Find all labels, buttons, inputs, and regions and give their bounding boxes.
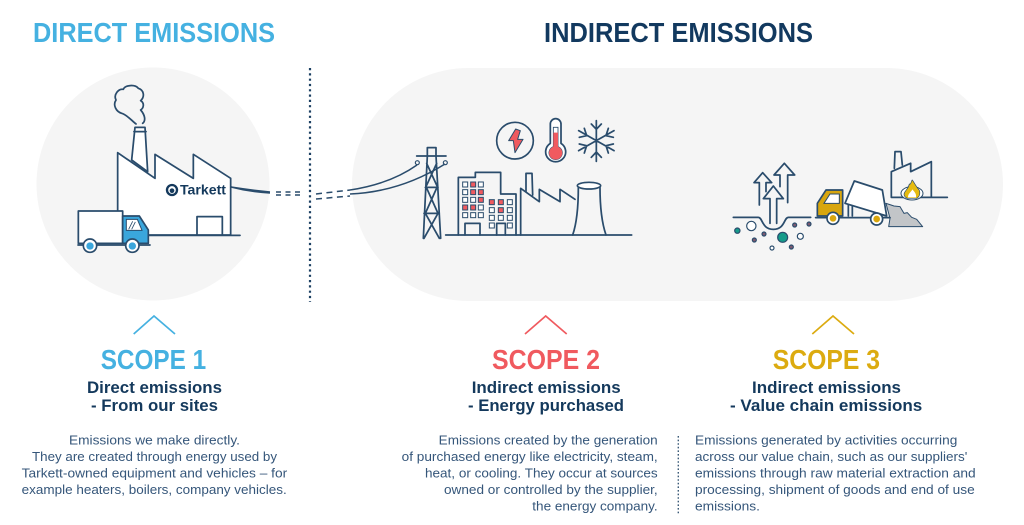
panel: indirect emissions pill <box>352 68 1003 301</box>
icon: flame <box>901 180 923 200</box>
scope 2 subheading <box>468 378 624 415</box>
scope 3 description <box>695 432 976 514</box>
icon: waste pile <box>886 203 923 227</box>
icon: dump truck <box>816 181 890 225</box>
icon: yellow chevron <box>812 316 854 334</box>
scope 1 subheading: Direct emissions <box>87 378 222 397</box>
icon: power plant factory <box>521 173 575 235</box>
scope 3 description: emissions through raw material extraction and <box>695 466 976 480</box>
illustration: Tarkett factory with truck <box>78 86 240 252</box>
column: scope 1 <box>22 316 288 497</box>
icon: factory building <box>118 153 231 235</box>
icon: transmission pylon <box>415 148 447 238</box>
scope 1 subheading <box>87 378 222 415</box>
scope 1 subheading: - From our sites <box>91 396 218 415</box>
icon: ground extraction <box>733 217 811 229</box>
scope 1 description: Emissions we make directly. <box>69 432 240 448</box>
column: scope 3 <box>695 316 976 514</box>
scope 2 subheading: Indirect emissions <box>472 378 621 397</box>
icon: material particles <box>735 221 811 250</box>
icon: waste factory <box>891 152 947 197</box>
heading: direct emissions: DIRECT EMISSIONS <box>33 17 275 48</box>
scope 2 description: Emissions created by the generation <box>439 432 658 448</box>
divider: direct versus indirect <box>309 68 311 302</box>
icon: red chevron <box>525 316 567 334</box>
scope 3 description: emissions. <box>695 498 760 514</box>
scope 1 description: They are created through energy used by <box>32 449 278 464</box>
scope 3 subheading: Indirect emissions <box>752 378 901 397</box>
icon: delivery truck <box>78 211 150 252</box>
icon: snowflake <box>579 121 614 161</box>
scope 2 title: SCOPE 2 <box>492 344 600 375</box>
illustration: power line connecting factory to pylon <box>231 164 445 199</box>
scope 3 subheading: - Value chain emissions <box>730 396 922 415</box>
scope 2 description: heat, or cooling. They occur at sources <box>425 466 658 480</box>
scope 2 subheading: - Energy purchased <box>468 396 624 415</box>
column: scope 2 <box>402 316 658 514</box>
scope 2 description: of purchased energy like electricity, steam, <box>402 449 658 464</box>
scope 3 subheading <box>730 378 922 415</box>
scope 3 description: across our value chain, such as our suppliers' <box>695 449 967 464</box>
scope 2 description: owned or controlled by the supplier, <box>444 482 658 497</box>
icon: chimney <box>132 127 148 172</box>
icon: blue chevron <box>134 316 175 334</box>
scope 2 description <box>402 432 658 514</box>
scope 2 description: the energy company. <box>532 498 658 514</box>
icon: cooling tower <box>573 182 606 235</box>
scope 1 description: Tarkett-owned equipment and vehicles – for <box>22 466 288 480</box>
icon: upward arrows <box>754 163 795 223</box>
icon: electricity bolt <box>497 122 533 159</box>
scope 3 description: Emissions generated by activities occurring <box>695 432 957 448</box>
divider: scope 2 and scope 3 <box>677 436 679 514</box>
panel: direct emissions circle <box>36 68 270 300</box>
icon: thermometer <box>546 119 566 162</box>
heading: indirect emissions: INDIRECT EMISSIONS <box>544 17 813 48</box>
icon: office building <box>458 172 516 235</box>
illustration: value chain <box>733 152 947 250</box>
scope 1 title: SCOPE 1 <box>101 344 206 375</box>
scope 3 title: SCOPE 3 <box>773 344 880 375</box>
logo: Tarkett: Tarkett <box>180 183 226 198</box>
scope 1 description: example heaters, boilers, company vehicles. <box>22 482 287 497</box>
scope 1 description <box>22 432 288 497</box>
scope 3 description: processing, shipment of goods and end of use <box>695 482 975 497</box>
ground line <box>446 232 632 238</box>
icon: factory door <box>197 217 222 235</box>
illustration: purchased energy <box>415 119 632 238</box>
icon: smoke <box>115 86 145 124</box>
